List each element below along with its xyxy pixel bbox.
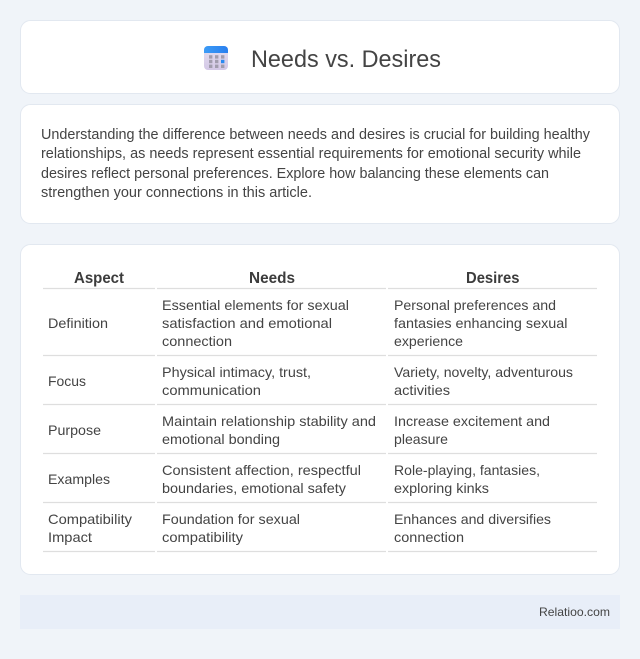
row: purpose: emotional bonding	[162, 431, 280, 447]
row: definition: Definition	[48, 315, 108, 331]
text block: introduction: Understanding the difference between needs and desires is crucial for building healthy	[41, 127, 591, 143]
row: compatibility impact: Foundation for sexual	[162, 511, 300, 527]
row: definition: fantasies enhancing sexual	[394, 315, 568, 331]
text block: introduction	[41, 127, 591, 201]
text block: introduction: relationships, as needs represent essential requirements for emotional security while	[41, 146, 581, 162]
table header: Needs	[249, 270, 295, 287]
row: definition: Essential elements for sexual	[162, 297, 349, 313]
row: compatibility impact: Impact	[48, 529, 92, 545]
row: examples: exploring kinks	[394, 480, 489, 496]
row: purpose: Increase excitement and	[394, 413, 550, 429]
icon: calendar	[204, 46, 228, 70]
row: compatibility impact: Compatibility	[48, 511, 132, 527]
row: examples: Examples	[48, 471, 110, 487]
row: focus	[48, 364, 573, 398]
footer source: Relatioo.com	[539, 605, 610, 619]
row: focus: Physical intimacy, trust,	[162, 364, 311, 380]
row: purpose: Maintain relationship stability and	[162, 413, 376, 429]
row: definition: experience	[394, 333, 463, 349]
panel: title card	[20, 20, 620, 94]
row: examples: Consistent affection, respectful	[162, 462, 361, 478]
row: examples: Role-playing, fantasies,	[394, 462, 540, 478]
row: compatibility impact: compatibility	[162, 529, 243, 545]
row: compatibility impact: connection	[394, 529, 464, 545]
table header: Aspect	[74, 270, 125, 287]
row: purpose: Purpose	[48, 422, 101, 438]
footer bar	[20, 595, 620, 629]
panel: introduction	[20, 104, 620, 224]
row: focus: activities	[394, 382, 450, 398]
title: Needs vs. Desires	[251, 46, 441, 73]
row: purpose	[48, 413, 550, 447]
row: definition	[48, 297, 568, 349]
row: definition: satisfaction and emotional	[162, 315, 332, 331]
row: purpose: pleasure	[394, 431, 448, 447]
row: compatibility impact: Enhances and diversifies	[394, 511, 551, 527]
table header: Desires	[466, 270, 520, 287]
row: examples	[48, 462, 540, 496]
row: definition: Personal preferences and	[394, 297, 556, 313]
text block: introduction: desires reflect personal preferences. Explore how balancing these elements can	[41, 166, 549, 182]
row: focus: communication	[162, 382, 261, 398]
row: definition: connection	[162, 333, 232, 349]
row: examples: boundaries, emotional safety	[162, 480, 346, 496]
row: compatibility impact	[48, 511, 551, 545]
row: focus: Focus	[48, 373, 86, 389]
text block: introduction: strengthen your connections in this article.	[41, 185, 312, 201]
panel: comparison table	[20, 244, 620, 574]
row: focus: Variety, novelty, adventurous	[394, 364, 573, 380]
table header	[74, 270, 520, 287]
